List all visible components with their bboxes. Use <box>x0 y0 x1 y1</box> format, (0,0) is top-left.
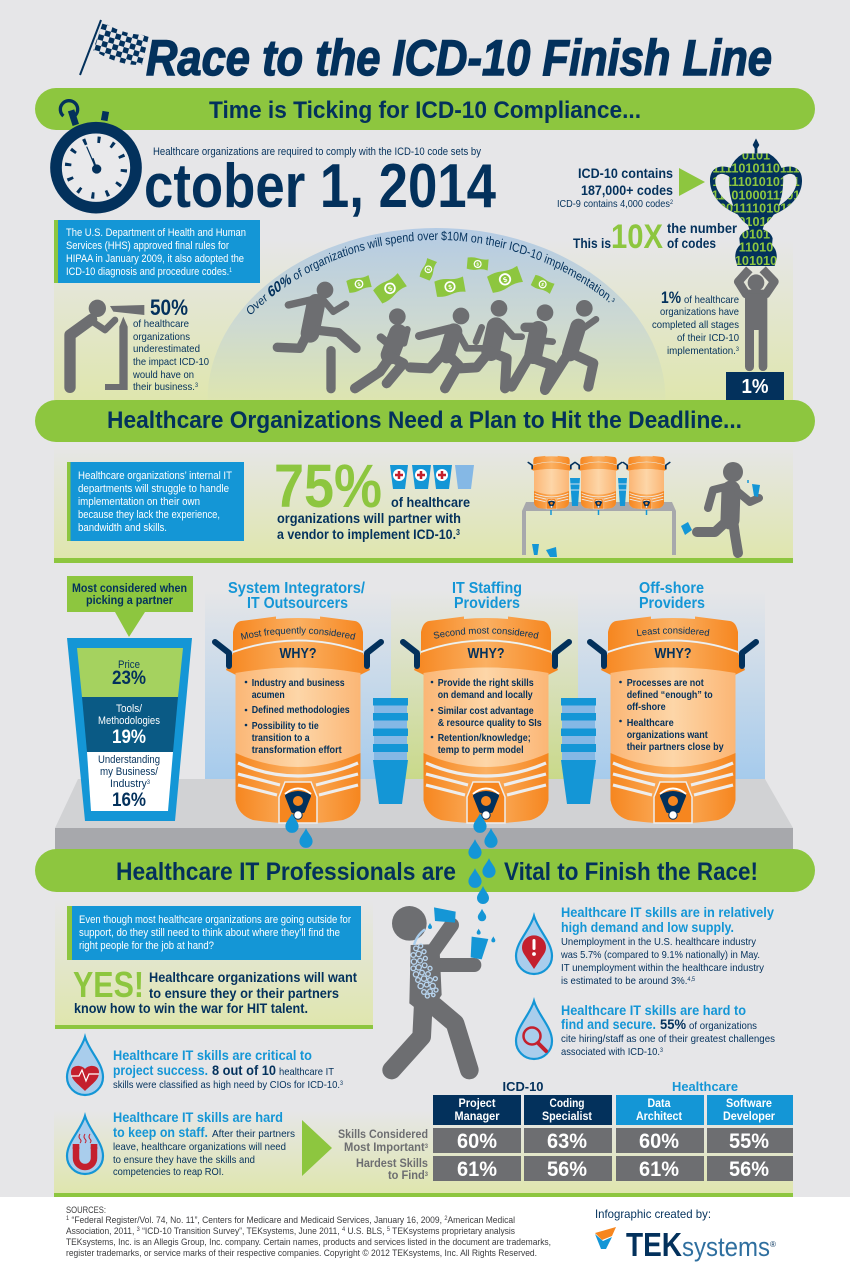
callout: internal IT: because they lack the experience, <box>78 509 220 521</box>
segment: tools: 19% <box>112 727 146 748</box>
icon: binary trophy: 01010 <box>738 215 774 229</box>
cooler: system integrators <box>212 616 384 824</box>
arrow to table <box>302 1120 332 1176</box>
stat: code counts: ICD-10 contains <box>578 166 673 181</box>
sources: TEKsystems, Inc. is an Allegis Group, Inc. company. Certain names, products and services listed in the document are trademarks, <box>66 1237 551 1247</box>
cooler: system integrators: transformation effort <box>252 744 342 756</box>
text: high demand low supply <box>560 904 774 987</box>
heading: IT staffing: Providers <box>454 595 520 612</box>
cooler: IT staffing: temp to perm model <box>438 744 524 756</box>
icon: magnifier drop <box>516 1001 552 1059</box>
panel stripe: skills <box>54 1193 793 1197</box>
text: high demand low supply: was 5.7% (compared to 9.1% nationally) in May. <box>560 949 760 961</box>
heading: IT staffing: IT Staffing <box>452 580 522 597</box>
heading: IT staffing <box>452 580 522 612</box>
cooler: IT staffing: on demand and locally <box>438 689 533 701</box>
text: hard to keep on staff: to ensure they have the skills and <box>113 1154 255 1166</box>
callout: most considered: picking a partner <box>86 593 173 607</box>
segment: tools: Tools/ <box>116 703 143 715</box>
callout: internal IT: bandwidth and skills. <box>78 522 167 534</box>
segment: understanding <box>87 752 173 811</box>
cooler: system integrators: Possibility to tie <box>252 720 319 732</box>
statement: YES: Healthcare organizations will want <box>149 969 357 985</box>
row labels <box>338 1129 429 1182</box>
text: hard to keep on staff: competencies to reap ROI. <box>113 1166 224 1178</box>
callout: HHS rules: HIPAA in January 2009, it also adopted the <box>66 253 244 265</box>
stat: 50 percent underestimated: their business. <box>133 381 201 393</box>
sources: TEKsystems proprietary analysis <box>390 1226 515 1236</box>
cooler: IT staffing: Provide the right skills <box>438 677 534 689</box>
icon: binary trophy: 0101 <box>742 227 770 241</box>
segment: price <box>77 648 183 697</box>
row labels: to Find <box>388 1170 426 1182</box>
cup stack: right <box>561 698 596 804</box>
stat: 50 percent underestimated: the impact ICD-10 <box>133 356 209 368</box>
logo: TEKsystems: ® <box>770 1240 776 1249</box>
callout: HHS rules: The U.S. Department of Health and Human <box>66 227 246 239</box>
text: hard to find and secure: 3 <box>660 1048 664 1054</box>
cooler: system integrators: Industry and business <box>252 677 345 689</box>
stat: 50 percent underestimated <box>132 295 209 393</box>
stat: 50 percent underestimated: underestimated <box>133 343 200 355</box>
logo: TEKsystems: systems <box>682 1232 770 1262</box>
text: hard to find and secure: cite hiring/staff as one of their greatest challenges <box>561 1033 775 1045</box>
column: project manager: Project <box>458 1096 496 1110</box>
checkered flag icon <box>80 20 149 75</box>
stat: 10X: 10X <box>611 218 663 256</box>
stat: code counts: ICD-9 contains 4,000 codes <box>557 199 680 210</box>
sources: Association, 2011, <box>66 1226 139 1236</box>
text: hard to keep on staff: Healthcare IT skills are hard <box>113 1109 283 1125</box>
text: high demand low supply: 4,5 <box>687 977 696 983</box>
callout: most considered: Most considered when <box>72 581 187 595</box>
logo: TEKsystems: TEK <box>626 1226 682 1263</box>
stat: 1 percent completed: 3 <box>736 347 740 353</box>
cooler: off-shore: defined “enough” to <box>627 689 713 701</box>
column: software developer: Software <box>726 1096 772 1110</box>
segment: tools <box>82 697 178 752</box>
stat: 50 percent underestimated: 3 <box>195 383 199 389</box>
deadline date: ctober 1, 2014 <box>144 152 496 221</box>
callout: internal IT: implementation on their own <box>78 496 200 508</box>
segment: understanding: 16% <box>112 790 146 811</box>
podium: 1%: 1% <box>742 376 769 398</box>
stat: code counts: 2 <box>670 200 674 206</box>
column: coding specialist: 63% <box>547 1130 587 1153</box>
icon: person holding trophy <box>738 269 774 371</box>
text: hard to keep on staff: to keep on staff. <box>113 1124 208 1140</box>
stat: 50 percent underestimated: organizations <box>133 331 190 343</box>
sources <box>66 1205 551 1258</box>
heading: system integrators <box>228 580 366 612</box>
callout: internal IT: departments will struggle to handle <box>78 483 229 495</box>
heading: off-shore <box>639 580 705 612</box>
stat: 10X: of codes <box>667 235 716 251</box>
sources: 2 <box>444 1216 448 1222</box>
segment: understanding: my Business/ <box>100 766 159 778</box>
section banner: time is ticking: Time is Ticking for ICD-10 Compliance... <box>209 97 641 124</box>
sources: SOURCES: <box>66 1205 106 1215</box>
sources: “ICD-10 Transition Survey”, TEKsystems, June 2011, <box>140 1226 342 1236</box>
icon: stopwatch <box>56 97 136 208</box>
cooler: off-shore <box>587 616 759 824</box>
sources: U.S. BLS, <box>345 1226 387 1236</box>
callout: internal IT: Healthcare organizations’ internal IT <box>78 470 232 482</box>
segment: understanding: Understanding <box>98 754 160 766</box>
heading: system integrators: IT Outsourcers <box>247 595 348 612</box>
stat: 10X <box>573 218 738 256</box>
column: coding specialist: Coding <box>550 1096 584 1110</box>
icon: binary trophy: 1111101010111 <box>712 175 800 189</box>
text: hard to find and secure <box>561 1002 775 1058</box>
segment: understanding: 3 <box>147 780 151 786</box>
callout: finding people: right people for the job at hand? <box>79 940 214 952</box>
sources: 5 <box>387 1227 391 1233</box>
cooler: IT staffing: Retention/knowledge; <box>438 732 531 744</box>
text: high demand low supply: Unemployment in the U.S. healthcare industry <box>561 936 757 948</box>
cooler: off-shore: organizations want <box>627 729 708 741</box>
column: software developer: 56% <box>729 1158 769 1181</box>
text: hard to keep on staff: After their partners <box>212 1128 295 1140</box>
callout: HHS rules: 1 <box>229 268 233 274</box>
column: data architect: 61% <box>639 1158 679 1181</box>
text: hard to find and secure: Healthcare IT skills are hard to <box>561 1002 746 1018</box>
row labels: Most Important <box>344 1142 427 1154</box>
text: critical to project success: healthcare IT <box>279 1066 335 1078</box>
row labels: Skills Considered <box>338 1129 428 1141</box>
icon: person drinking water <box>392 906 495 1070</box>
column background: system integrators <box>205 590 391 779</box>
callout: HHS rules: Services (HHS) approved final rules for <box>66 240 229 252</box>
stat: 1 percent completed: completed all stages <box>652 319 739 331</box>
section banner: IT professionals: Healthcare IT Professionals are <box>116 858 456 886</box>
cooler: system integrators: WHY? <box>280 646 317 662</box>
sources: register trademarks, or service marks of their respective companies. Copyright © 2012 TEKsystems, Inc. All Rights Reserved. <box>66 1248 537 1258</box>
stat: 10X: the number <box>667 220 738 236</box>
footer background <box>0 1197 850 1275</box>
stat: 10X: This is <box>573 235 611 251</box>
sources: 1 <box>66 1216 70 1222</box>
podium: 1% <box>726 372 784 402</box>
cooler: system integrators: Defined methodologies <box>252 704 350 716</box>
cooler: IT staffing: Second most considered <box>434 627 539 639</box>
chart: partner criteria cup <box>67 638 192 821</box>
stat text: vendor partner: 3 <box>456 528 460 537</box>
section banner: need a plan <box>35 400 815 442</box>
column: project manager <box>433 1095 521 1181</box>
icon: binary trophy: 11010 <box>739 241 773 255</box>
icon: binary trophy: 1110100011101 <box>712 188 800 202</box>
text: critical to project success: skills were classified as high need by CIOs for ICD-10. <box>113 1079 366 1091</box>
stat: 1 percent completed: of healthcare <box>684 294 739 306</box>
text: critical to project success: 8 out of 10 <box>212 1062 276 1078</box>
segment: tools: Methodologies <box>98 715 160 727</box>
column background: off-shore <box>578 590 765 779</box>
panel: professionals background <box>55 900 373 1025</box>
text: critical to project success: Healthcare IT skills are critical to <box>113 1047 312 1063</box>
text: critical to project success: project success. <box>113 1062 208 1078</box>
row labels: 3 <box>425 1144 429 1150</box>
section banner: time is ticking <box>35 88 815 130</box>
icon: binary trophy: 0101 <box>742 148 770 162</box>
cooler: off-shore: WHY? <box>654 646 692 662</box>
column: software developer: 55% <box>729 1130 769 1153</box>
stat text: vendor partner <box>277 494 470 542</box>
panel: dome <box>208 228 666 400</box>
column: coding specialist: 56% <box>547 1158 587 1181</box>
text: critical to project success <box>113 1047 344 1091</box>
cooler: system integrators: Most frequently considered <box>240 626 356 640</box>
logo: TEKsystems <box>595 1226 776 1263</box>
stat: 50 percent underestimated: would have on <box>132 369 194 381</box>
cup stack: left <box>373 698 408 804</box>
sources: “Federal Register/Vol. 74, No. 11”, Centers for Medicare and Medicaid Services, January 16, 2009, <box>69 1215 444 1225</box>
segment: price: Price <box>118 659 140 671</box>
segment: price: 23% <box>112 668 146 689</box>
cooler: IT staffing <box>400 616 572 824</box>
callout: internal IT <box>67 462 244 541</box>
cooler: off-shore: off-shore <box>627 701 666 713</box>
sources: 3 <box>137 1227 140 1233</box>
heading: off-shore: Providers <box>639 595 705 612</box>
cooler: IT staffing: WHY? <box>468 646 505 662</box>
icon: binary trophy: 1111010110111 <box>712 162 800 176</box>
text: hard to find and secure: find and secure. <box>561 1016 656 1032</box>
callout: most considered <box>67 576 193 637</box>
stat: 1 percent completed <box>652 288 740 357</box>
stat: 1 percent completed: of their ICD-10 <box>677 332 739 344</box>
stat text: vendor partner: a vendor to implement ICD-10. <box>277 526 478 542</box>
callout: finding people: Even though most healthcare organizations are going outside for <box>79 914 351 926</box>
row labels: Hardest Skills <box>356 1158 428 1170</box>
shelf <box>55 779 793 852</box>
text: hard to find and secure: associated with ICD-10. <box>561 1046 672 1058</box>
sources: 4 <box>342 1227 346 1233</box>
icon: binary trophy: 101010 <box>735 254 777 268</box>
column background: IT staffing <box>391 590 578 779</box>
text: high demand low supply: is estimated to be around 3%. <box>561 975 700 987</box>
callout: HHS rules: ICD-10 diagnosis and procedure codes. <box>66 266 260 278</box>
table: skills <box>433 1079 793 1181</box>
row labels: 3 <box>425 1172 429 1178</box>
icon: person with telescope <box>70 300 144 390</box>
icon: table with coolers <box>522 456 676 557</box>
text: high demand low supply: Healthcare IT skills are in relatively <box>561 904 774 920</box>
heading: system integrators: System Integrators/ <box>228 580 366 597</box>
text: hard to find and secure: of organizations <box>689 1020 757 1032</box>
stat: 1 percent completed: 1% <box>661 288 681 307</box>
statement: YES: to ensure they or their partners <box>149 985 339 1001</box>
stat: code counts: 187,000+ codes <box>581 183 673 198</box>
column: project manager: 60% <box>457 1130 497 1153</box>
panel: plan background <box>54 444 793 558</box>
text: hard to keep on staff <box>113 1109 295 1178</box>
stat: 50 percent underestimated: of healthcare <box>133 318 189 330</box>
stat text: vendor partner: organizations will partner with <box>277 510 461 526</box>
cooler: off-shore: Processes are not <box>627 677 704 689</box>
group header: Healthcare: Healthcare <box>672 1079 738 1094</box>
arc text: 60 percent spending: 3 <box>612 298 615 302</box>
column: project manager: 61% <box>457 1158 497 1181</box>
icon: magnet drop <box>67 1116 103 1174</box>
statement: YES: know how to win the war for HIT talent. <box>74 1000 308 1016</box>
cooler: IT staffing: Similar cost advantage <box>438 705 534 717</box>
heading: off-shore: Off-shore <box>639 580 704 597</box>
text: high demand low supply: IT unemployment within the healthcare industry <box>561 962 765 974</box>
icon: binary trophy: 0001111010111 <box>712 202 800 216</box>
icon: flying money <box>346 257 555 304</box>
title: Race to the ICD-10 Finish Line <box>146 30 772 86</box>
panel: timing background <box>54 240 793 400</box>
text: hard to find and secure: 55% <box>660 1016 687 1032</box>
intro sentence: Healthcare organizations are required to comply with the ICD-10 code sets by <box>153 146 481 158</box>
cooler: off-shore: Least considered <box>636 626 710 636</box>
stat: 1 percent completed: implementation. <box>667 345 741 357</box>
icon: four cups, three marked <box>390 465 474 489</box>
icon: runners and hurdle <box>277 282 596 390</box>
sources: American Medical <box>447 1215 515 1225</box>
stat: 75 percent: 75% <box>274 452 382 520</box>
arrow to trophy <box>679 168 705 196</box>
panel stripe: professionals <box>55 1025 373 1029</box>
arc text: 60 percent spending: Over 60% of organizations will spend over $10M on their ICD-10 implementation. <box>247 230 610 314</box>
statement: YES: YES! <box>73 964 144 1005</box>
column: data architect: Architect <box>636 1109 682 1123</box>
stat: code counts <box>557 166 674 210</box>
text: hard to keep on staff: leave, healthcare organizations will need <box>113 1141 286 1153</box>
icon: running person with cup <box>681 462 760 553</box>
callout: HHS rules <box>54 220 260 283</box>
cooler: system integrators: transition to a <box>252 732 310 744</box>
section banner: IT professionals: Vital to Finish the Race! <box>504 858 758 886</box>
icon: heart drop <box>67 1037 103 1095</box>
column: software developer: Developer <box>723 1109 775 1123</box>
icon: alert drop <box>516 916 552 974</box>
segment: understanding: Industry <box>110 778 149 790</box>
column: coding specialist <box>524 1095 612 1181</box>
credit line: Infographic created by: <box>595 1207 711 1221</box>
text: critical to project success: 3 <box>340 1081 344 1087</box>
section banner: need a plan: Healthcare Organizations Need a Plan to Hit the Deadline... <box>107 407 742 434</box>
statement: YES <box>73 964 357 1016</box>
column: data architect: Data <box>648 1096 671 1110</box>
column: data architect: 60% <box>639 1130 679 1153</box>
cooler: IT staffing: & resource quality to SIs <box>438 717 542 729</box>
column: coding specialist: Specialist <box>542 1109 592 1123</box>
stat text: vendor partner: of healthcare <box>391 494 470 510</box>
cooler: off-shore: Healthcare <box>627 717 674 729</box>
water drops falling from coolers <box>285 813 498 921</box>
cooler: off-shore: their partners close by <box>627 741 724 753</box>
column: project manager: Manager <box>454 1109 500 1123</box>
group header: ICD-10: ICD-10 <box>502 1079 544 1094</box>
stat: 1 percent completed: organizations have <box>660 306 739 318</box>
panel stripe: plan <box>54 558 793 563</box>
callout: finding people <box>67 906 361 960</box>
section banner: IT professionals <box>35 849 815 892</box>
text: high demand low supply: high demand and low supply. <box>561 919 734 935</box>
cooler: system integrators: acumen <box>252 689 285 701</box>
stat: 50 percent underestimated: 50% <box>150 295 188 320</box>
panel: skills background <box>54 1110 793 1193</box>
callout: finding people: support, do they still need to think about where they’ll find the <box>79 927 340 939</box>
column: data architect <box>616 1095 704 1181</box>
icon: binary trophy <box>707 138 807 268</box>
column: software developer <box>707 1095 793 1181</box>
